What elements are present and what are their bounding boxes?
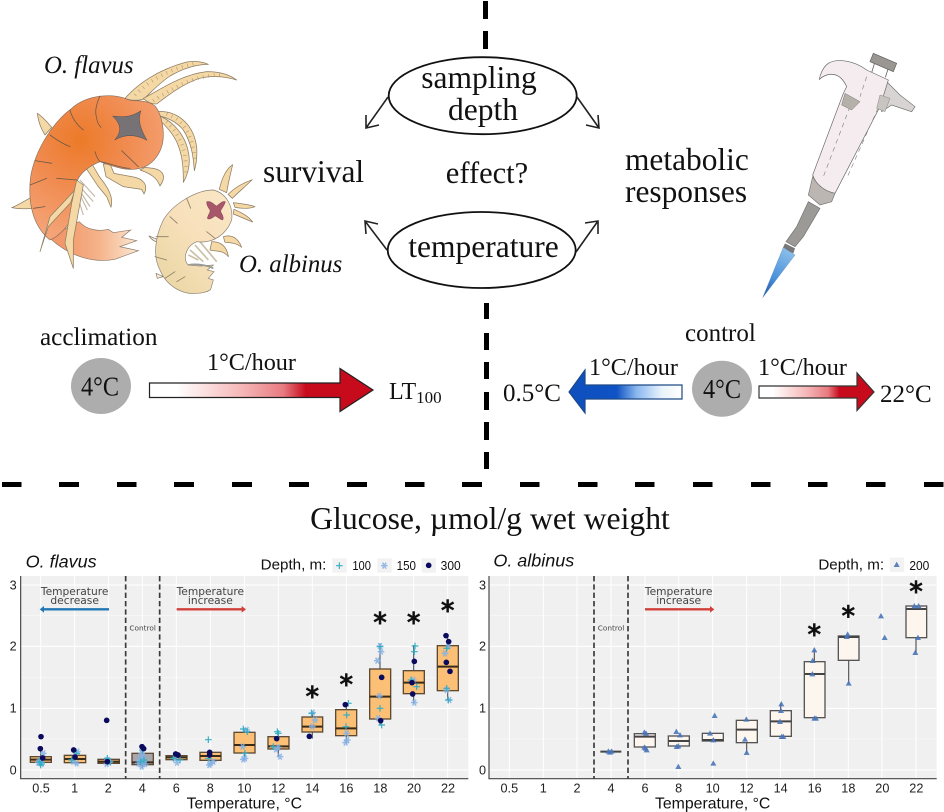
legend: depth: 300 <box>441 559 461 573</box>
significance asterisks: * <box>373 608 387 639</box>
x axis labels: 8 <box>675 782 682 796</box>
x axis labels: 2 <box>573 782 581 796</box>
chart title: O. albinus <box>493 551 574 571</box>
legend: depth: Depth, m: <box>261 556 326 573</box>
arrow: cooling <box>569 370 682 413</box>
species label: O. flavus: O. flavus <box>44 52 134 79</box>
significance asterisks: * <box>441 595 454 626</box>
y axis labels: 0 <box>10 763 17 777</box>
oval: sampling depth: depth <box>448 92 518 127</box>
x axis labels: 8 <box>207 782 214 796</box>
x axis labels: 16 <box>339 782 353 796</box>
illustration: pipette <box>763 53 915 298</box>
x axis labels: 1 <box>540 782 547 796</box>
annotation: temperature increase: Temperature <box>644 585 712 598</box>
eye <box>113 111 147 140</box>
annotation: temperature increase: increase <box>188 594 233 607</box>
x axis labels: 22 <box>441 782 455 796</box>
label: metabolic responses: responses <box>625 174 747 209</box>
x axis labels: 10 <box>706 782 720 796</box>
oval: sampling depth: sampling <box>421 60 537 95</box>
arrow: warming to LT100 <box>150 368 373 412</box>
label: heating rate: 1°C/hour <box>207 349 296 376</box>
illustration: O. flavus amphipod <box>12 61 237 268</box>
legend: depth <box>261 556 461 573</box>
circle: 4°C acclimation: 4°C <box>81 372 119 402</box>
label: 0.5°C: 0.5°C <box>503 380 561 407</box>
x axis labels: 18 <box>373 782 387 796</box>
species label: O. albinus: O. albinus <box>239 251 342 278</box>
x axis labels: 18 <box>841 782 855 796</box>
significance asterisks: * <box>306 681 319 712</box>
label: 22°C: 22°C <box>880 381 932 408</box>
x axis labels: 6 <box>173 782 180 796</box>
label: LT100: LT <box>389 379 416 405</box>
x axis title: Temperature, °C <box>655 795 770 812</box>
label: warming rate: 1°C/hour <box>758 354 847 381</box>
annotation: control: Control <box>598 623 624 632</box>
y axis labels: 3 <box>10 578 17 592</box>
oval: sampling depth <box>389 57 577 134</box>
y axis labels: 2 <box>479 640 486 654</box>
label: acclimation: acclimation <box>40 324 158 351</box>
x axis labels: 10 <box>237 782 251 796</box>
significance asterisks: * <box>808 620 821 651</box>
arrows from ovals to outcomes <box>365 97 599 252</box>
x axis labels: 2 <box>105 782 112 796</box>
legend: depth <box>818 556 929 573</box>
x axis labels: 4 <box>139 782 146 796</box>
chart title: O. flavus <box>26 551 97 571</box>
x axis labels: 1 <box>71 782 78 796</box>
legend: depth: 200 <box>909 559 929 573</box>
body and tail <box>50 222 138 260</box>
x axis labels <box>501 782 923 796</box>
significance asterisks: * <box>407 608 420 639</box>
plot panel <box>21 576 468 779</box>
chart: O. flavus glucose boxplots <box>10 551 468 812</box>
x axis labels: 0.5 <box>32 782 50 796</box>
circle: 4°C control <box>692 361 752 417</box>
vertical dashed divider <box>483 1 489 469</box>
whiskers <box>41 637 448 768</box>
oval: temperature <box>388 212 576 288</box>
x axis labels: 16 <box>808 782 822 796</box>
legend: depth: 150 <box>397 559 416 573</box>
label: effect?: effect? <box>446 156 528 190</box>
annotation: temperature decrease: decrease <box>50 594 99 607</box>
plot panel <box>489 576 937 779</box>
whiskers <box>747 638 916 753</box>
x axis labels: 4 <box>607 782 615 796</box>
annotation: temperature decrease: Temperature <box>40 585 108 598</box>
eye <box>207 201 225 220</box>
data points: 300 m <box>37 633 453 764</box>
boxes <box>30 646 458 765</box>
label: survival: survival <box>263 154 364 189</box>
x axis labels: 14 <box>305 782 319 796</box>
body <box>156 190 232 294</box>
annotation: temperature increase <box>644 585 714 613</box>
annotation: temperature increase <box>176 585 246 613</box>
significance asterisks: * <box>842 601 855 632</box>
oval: temperature: temperature <box>408 229 559 264</box>
annotation: temperature decrease <box>40 585 109 613</box>
blue pipette tip <box>763 247 795 298</box>
chart: O. albinus glucose boxplots <box>479 551 937 812</box>
y axis labels <box>10 578 17 777</box>
annotation: temperature increase: increase <box>656 594 701 607</box>
x axis labels <box>32 782 455 796</box>
arrow: warming <box>759 373 874 410</box>
x axis labels: 0.5 <box>501 782 518 796</box>
y axis labels: 3 <box>479 578 486 592</box>
label: LT100: 100 <box>416 388 442 407</box>
circle: 4°C control: 4°C <box>703 374 741 404</box>
x axis labels: 20 <box>407 782 421 796</box>
y axis labels: 1 <box>479 702 486 716</box>
annotation: control: Control <box>129 624 156 633</box>
y axis labels: 2 <box>10 640 17 654</box>
horizontal dashed divider <box>2 482 944 487</box>
significance asterisks <box>306 595 454 712</box>
x axis labels: 22 <box>909 782 923 796</box>
heading: glucose: Glucose, µmol/g wet weight <box>310 501 670 536</box>
legend: depth: 100 <box>352 559 371 573</box>
significance asterisks: * <box>340 669 353 700</box>
significance asterisks: * <box>909 576 923 607</box>
x axis labels: 20 <box>875 782 889 796</box>
label: control: control <box>685 320 756 347</box>
y axis labels <box>479 578 486 777</box>
data points: 100 m <box>36 643 452 768</box>
x axis labels: 12 <box>271 782 285 796</box>
annotation: temperature increase: Temperature <box>176 585 244 598</box>
x axis labels: 12 <box>740 782 754 796</box>
significance asterisks <box>808 576 923 651</box>
y axis labels: 0 <box>479 763 486 777</box>
boxes <box>600 606 927 752</box>
legend: depth: Depth, m: <box>818 556 884 573</box>
circle: 4°C acclimation <box>71 358 131 414</box>
x axis labels: 6 <box>641 782 649 796</box>
x axis labels: 14 <box>774 782 788 796</box>
data points: 150 m <box>35 643 453 770</box>
data points: 200 m <box>605 603 922 769</box>
illustration: O. albinus amphipod <box>149 165 255 294</box>
label: cooling rate: 1°C/hour <box>589 354 678 381</box>
label: metabolic responses: metabolic <box>625 142 749 177</box>
y axis labels: 1 <box>10 702 17 716</box>
